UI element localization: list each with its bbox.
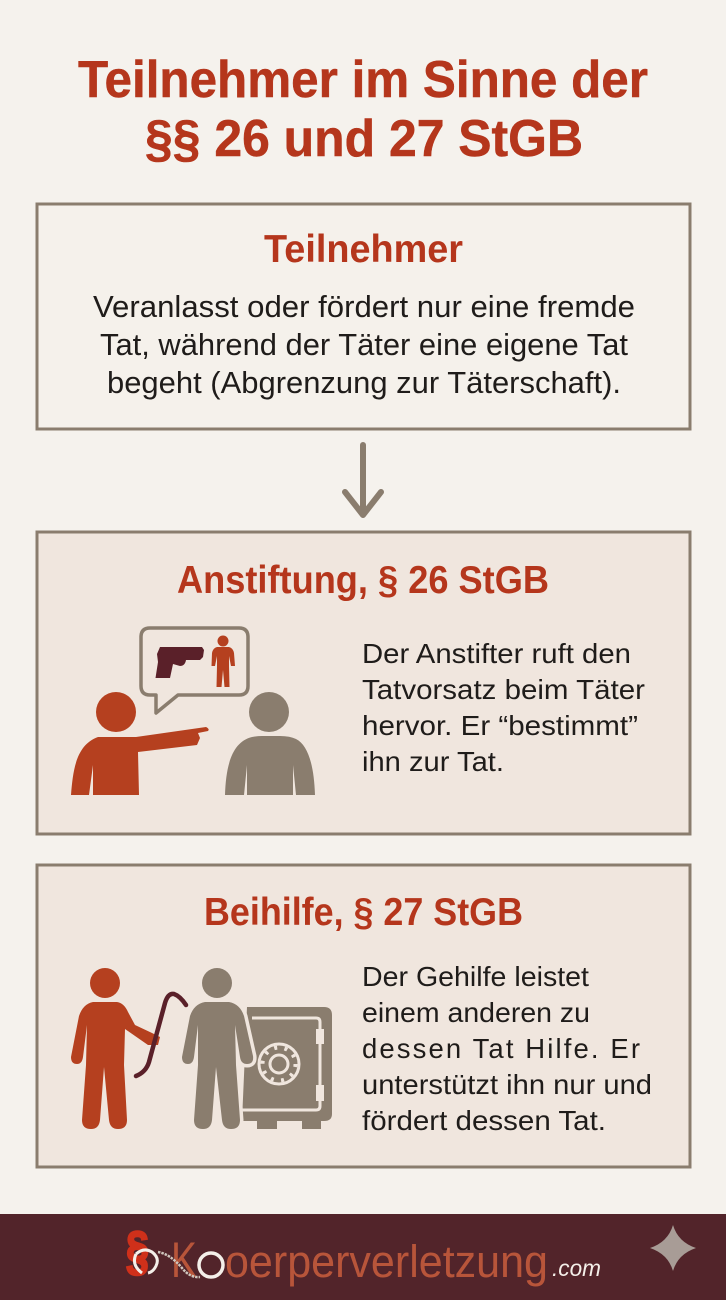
text block: Beihilfe description: unterstützt ihn nur und	[362, 1069, 652, 1100]
panel: Anstiftung	[37, 532, 690, 834]
icon: small person	[212, 636, 235, 687]
icon: pointing instigator	[71, 692, 209, 795]
heading: Anstiftung: Anstiftung, § 26 StGB	[177, 559, 549, 602]
panel: Teilnehmer	[37, 204, 690, 429]
icon: gun	[156, 647, 204, 678]
text block: Beihilfe description: einem anderen zu	[362, 997, 590, 1028]
icon: safe	[242, 1007, 332, 1129]
logo text: oerperverletzung	[225, 1236, 548, 1287]
text block: Teilnehmer definition: begeht (Abgrenzung zur Täterschaft).	[107, 365, 621, 400]
icon: assisted perpetrator	[182, 968, 253, 1129]
text block: Beihilfe description	[362, 961, 652, 1136]
icon: handcuffs	[134, 1250, 223, 1277]
title: Teilnehmer im Sinne der	[78, 51, 648, 109]
icon: accomplice with crowbar	[71, 968, 186, 1129]
text block: Beihilfe description: dessen Tat Hilfe. Er	[362, 1033, 640, 1064]
title	[78, 51, 648, 168]
text block: Anstiftung description	[362, 638, 645, 777]
text block: Beihilfe description: Der Gehilfe leistet	[362, 961, 589, 992]
title: §§ 26 und 27 StGB	[145, 110, 583, 168]
text block: Anstiftung description: Der Anstifter ruft den	[362, 638, 631, 669]
logo paragraph sign: §	[126, 1221, 149, 1281]
text block: Anstiftung description: Tatvorsatz beim Täter	[362, 674, 645, 705]
footer band	[0, 1214, 726, 1300]
panel: Beihilfe	[37, 865, 690, 1167]
text block: Teilnehmer definition	[93, 289, 635, 400]
text block: Teilnehmer definition: Veranlasst oder fördert nur eine fremde	[93, 289, 635, 324]
text block: Anstiftung description: ihn zur Tat.	[362, 746, 504, 777]
logo suffix: .com	[552, 1255, 601, 1281]
icon: perpetrator	[225, 692, 315, 795]
text block: Teilnehmer definition: Tat, während der Täter eine eigene Tat	[100, 327, 628, 362]
logo letter K: K	[171, 1232, 197, 1288]
text block: Beihilfe description: fördert dessen Tat.	[362, 1105, 606, 1136]
logo: Koerperverletzung.com	[126, 1221, 601, 1288]
icon: crowbar	[136, 994, 186, 1076]
icon: speech bubble with gun and person	[141, 628, 248, 713]
arrow: down	[345, 445, 381, 515]
heading: Teilnehmer: Teilnehmer	[264, 228, 463, 271]
text block: Anstiftung description: hervor. Er “bestimmt”	[362, 710, 638, 741]
icon: safe dial	[259, 1044, 299, 1084]
heading: Beihilfe: Beihilfe, § 27 StGB	[204, 891, 523, 934]
icon: sparkle	[650, 1225, 696, 1271]
